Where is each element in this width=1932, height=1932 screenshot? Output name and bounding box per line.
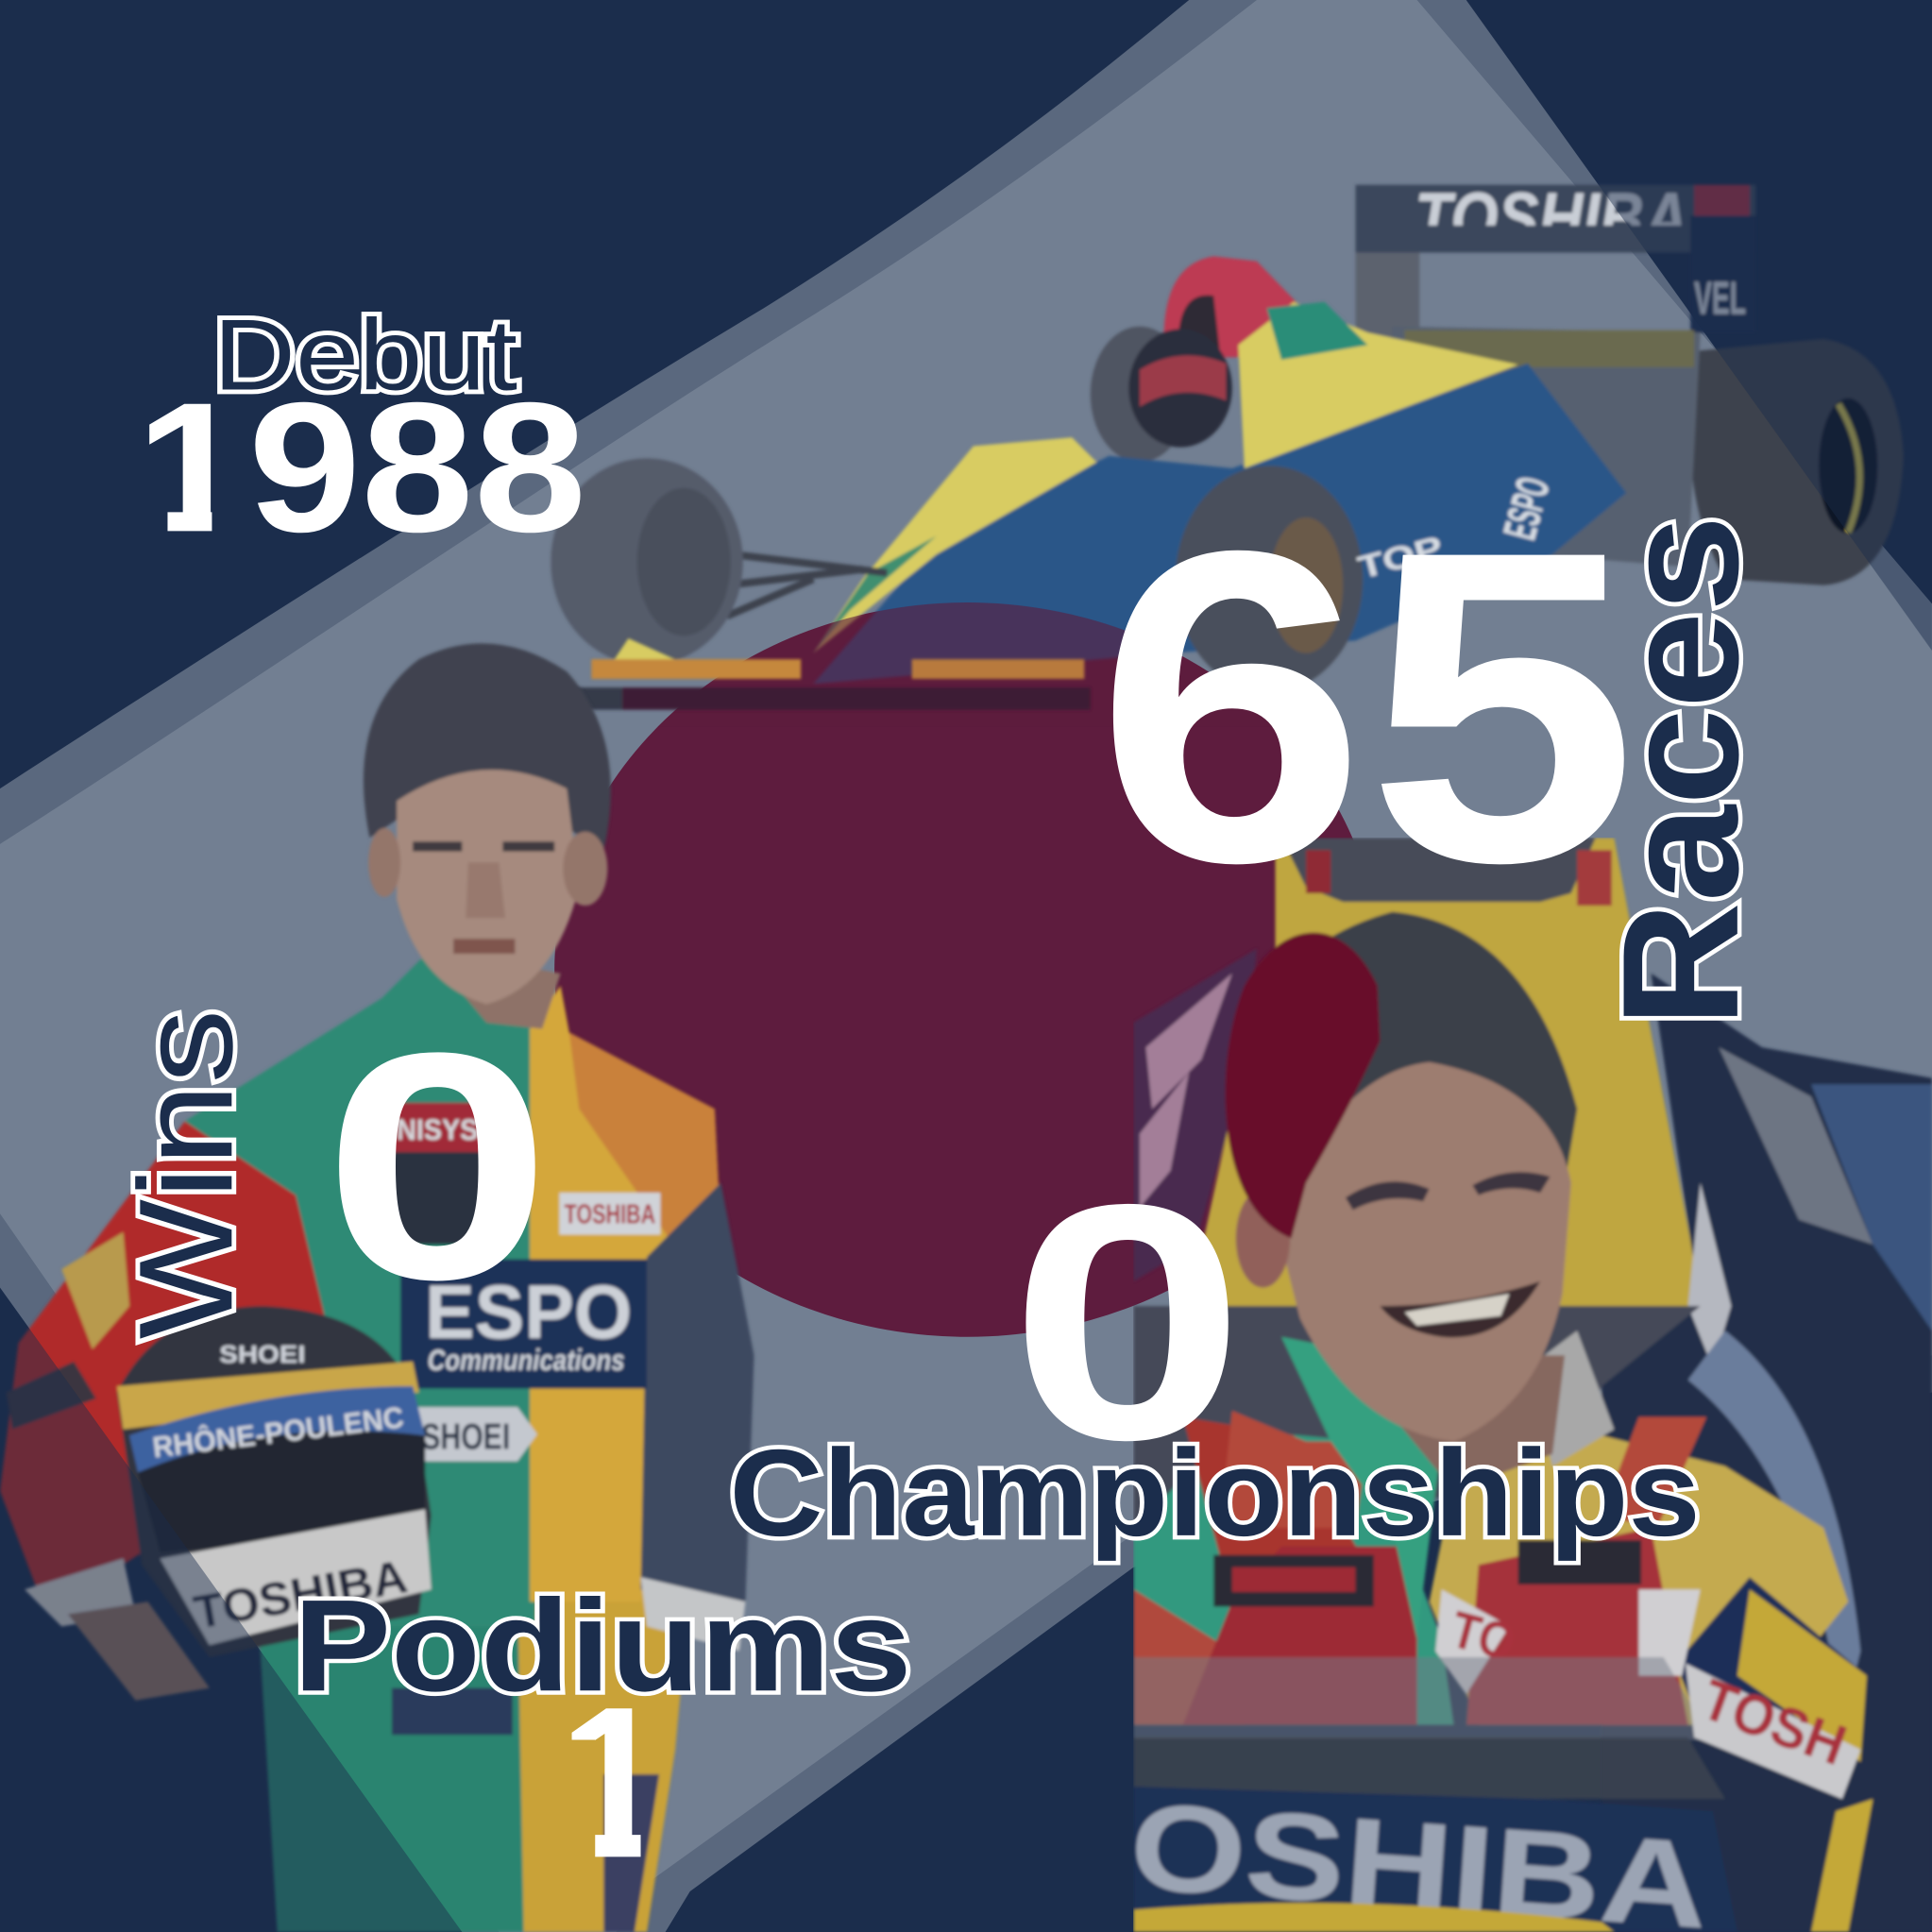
suspension [727,554,887,616]
stat: races [1095,459,1773,1027]
yellow seat back [1189,838,1703,1306]
ear [1236,1189,1290,1288]
torso yellow [530,986,720,1602]
suit left [1133,1430,1454,1725]
front right wheel [1176,466,1363,692]
face [397,770,579,1004]
helmet [1128,329,1232,448]
front left wheel [551,458,743,666]
left arm red [0,1121,327,1589]
far rear tyre [1091,327,1189,462]
lower patch [392,1688,513,1735]
label: Races: Races [1589,515,1773,1027]
seat dark surround [1133,1306,1701,1528]
label: Championships: Championships [729,1424,1701,1562]
livery pattern at left [1133,949,1257,1281]
bodywork blue [813,364,1626,684]
navy nose band [1133,1787,1737,1932]
legs [259,1589,690,1932]
TOSHIBA patch [559,1193,660,1234]
photo: smiling driver in cockpit [1126,838,1932,1932]
stat: podiums [294,1573,912,1903]
dark bodywork right [1602,974,1932,1932]
green patch [1266,302,1367,360]
rear wing: TOSHIBA [1415,178,1688,259]
TOSHIBA patch on shoulder: TOSH [1694,1668,1855,1777]
engine bay [1380,327,1701,567]
ESPO patch [400,1260,647,1389]
helmet [117,1306,432,1657]
red posts [1306,850,1330,893]
orange shoulder [569,1032,720,1250]
shoulder patch [1679,1576,1856,1709]
nose yellow [813,437,1096,653]
neck [425,949,561,1029]
ESPO patch: ESPO [425,1270,632,1355]
photo: racing car: ESPO [1493,471,1560,545]
number: wins 0: 0 [323,987,552,1347]
helmet: RHÔNE-POULENC [151,1399,405,1465]
SHOEI patch: SHOEI [421,1416,510,1457]
torso green [185,955,536,1626]
hair [1330,910,1579,1167]
tint of circle over car nose [657,602,1209,727]
yellow rim [1133,1903,1614,1932]
stat: championships [729,1136,1701,1562]
right arm [641,1183,754,1602]
roll hoop [1163,256,1296,357]
stat: wins [110,987,552,1347]
stat: debut [136,297,586,570]
face [1276,1062,1571,1442]
rear wing [1355,178,1755,345]
helmet: TOSHIBA [190,1550,412,1639]
number: 65: 65 [1095,459,1637,955]
neck [1401,1354,1566,1475]
navy veil: bottom left corner [0,1288,462,1932]
number: podiums 1: 1 [558,1662,669,1903]
photo: racing car [551,178,1904,692]
sponsor text: TOP [1354,530,1447,586]
label: Debut: Debut [213,297,517,411]
rear wing: VEL [1694,272,1746,325]
number: 1988: 1988 [136,364,586,570]
red circle [554,602,1380,1337]
right yellow sliver [1811,1799,1873,1932]
rear wheel [1689,339,1904,585]
label: Podiums: Podiums [294,1573,912,1719]
hair [364,643,611,850]
photo: driver standing with helmet [0,643,754,1932]
engine cover yellow [1238,302,1518,468]
harness [1183,1411,1706,1725]
NISYS patch [392,1103,484,1245]
collar [1281,1337,1442,1638]
TOSHIBA patch: TOSHIBA [565,1200,655,1230]
front wing [462,638,1091,710]
number: championships 0: 0 [1009,1136,1246,1510]
dark red hair through circle [1226,933,1380,1238]
windscreen [1133,1657,1713,1739]
suit right [1430,1430,1848,1725]
label: Wins: Wins [110,1009,260,1339]
smile [1380,1281,1540,1337]
helmet: SHOEI [219,1340,306,1368]
visor [1281,838,1596,902]
eyes [1346,1181,1430,1210]
harness: TO [1445,1600,1522,1672]
ESPO patch: Communications [428,1344,625,1377]
navy veil: top right corner [1466,0,1932,651]
NISYS patch: NISYS [397,1113,478,1146]
